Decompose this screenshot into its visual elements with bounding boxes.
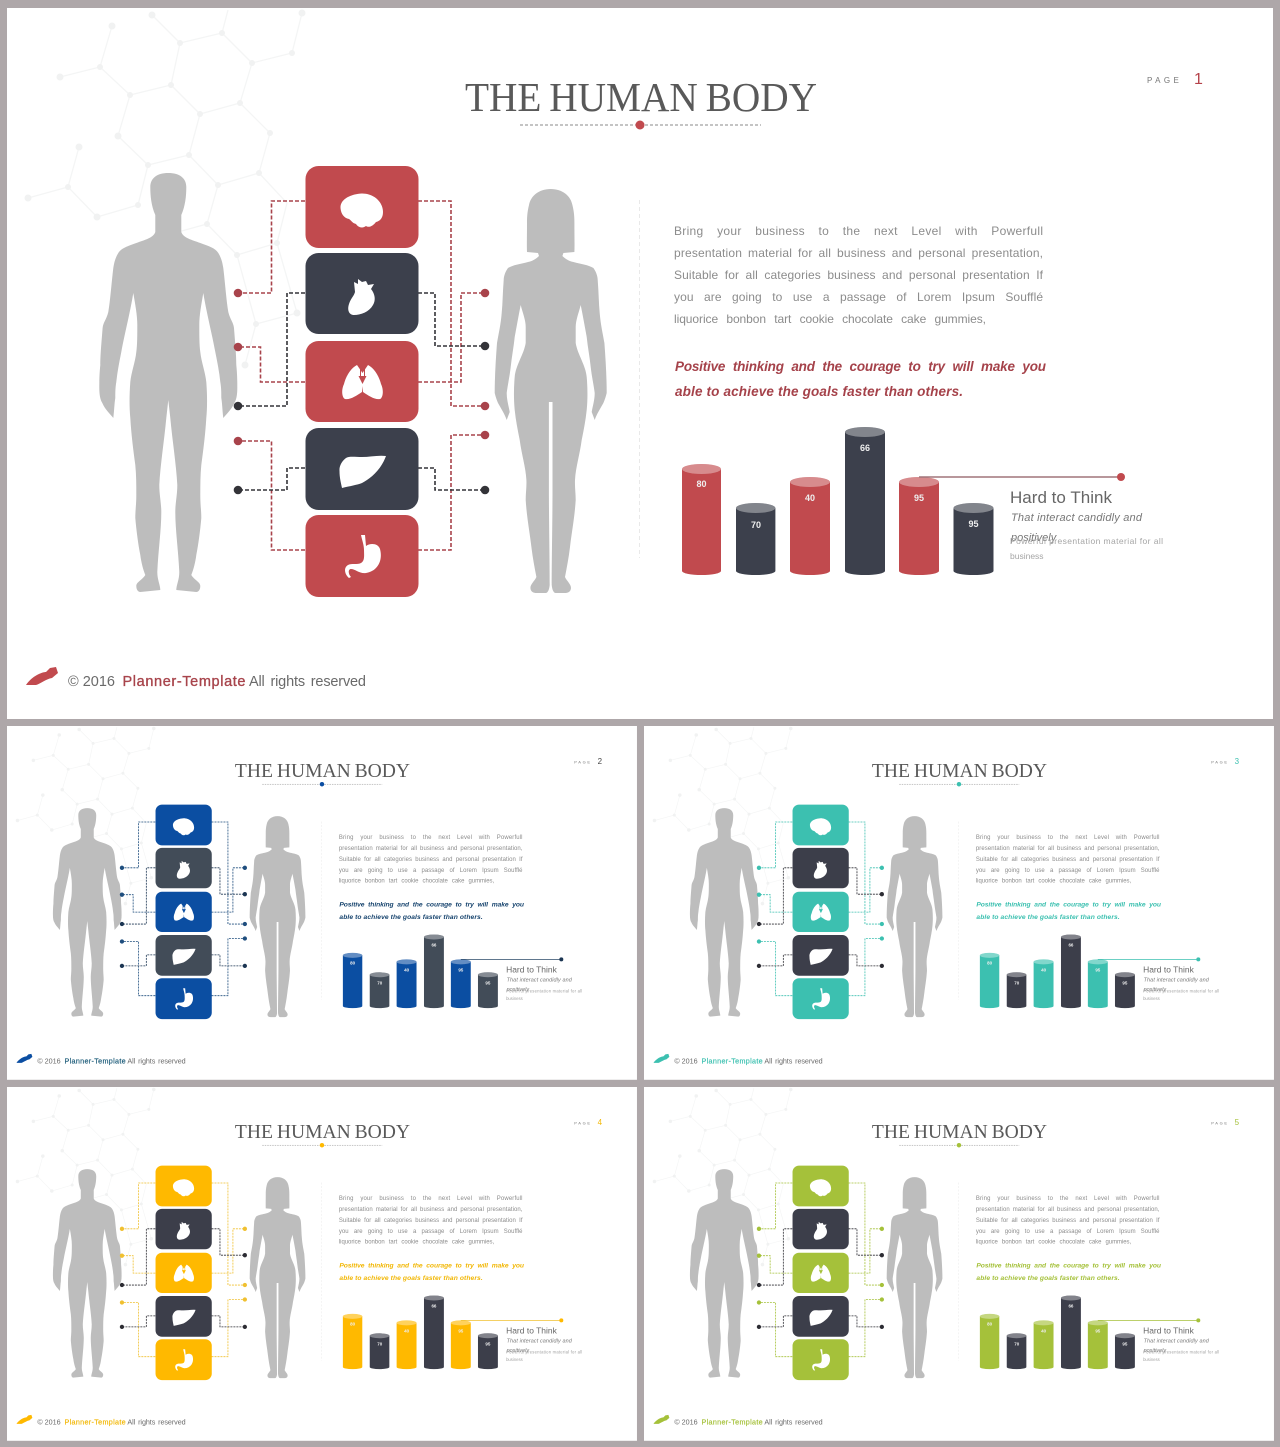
tile: stomach	[306, 515, 418, 597]
title: THE HUMAN BODY	[872, 760, 1047, 782]
tile: stomach	[793, 978, 849, 1019]
bar chart: 95	[485, 1341, 491, 1346]
body text: you are going to use a passage of Lorem Ipsum Soufflé	[674, 290, 1043, 304]
tile: lungs	[793, 892, 849, 932]
tile: liver	[306, 428, 418, 510]
highlighted quote: Positive thinking and the courage to try will make you	[976, 1263, 1161, 1270]
tile: lungs	[306, 341, 418, 422]
body text: you are going to use a passage of Lorem Ipsum Soufflé	[976, 868, 1160, 874]
bar chart: 80	[987, 1321, 993, 1326]
bar chart: 66	[431, 942, 437, 947]
bar chart: 95	[458, 967, 464, 972]
slide background	[7, 726, 637, 1080]
highlighted quote	[339, 1263, 524, 1282]
body text: presentation material for all business and personal presentation,	[339, 1207, 523, 1213]
callout: positively	[1143, 1348, 1167, 1354]
callout: That interact candidly and	[1144, 977, 1210, 983]
page number: PAGE	[574, 1120, 592, 1125]
tile: heart	[156, 848, 212, 888]
bar chart: 80	[350, 960, 356, 965]
callout: Powerful presentation material for all	[1143, 1350, 1219, 1355]
tile: heart	[793, 1209, 849, 1249]
body text: Bring your business to the next Level with Powerfull	[339, 835, 523, 841]
bar chart	[980, 1295, 1135, 1369]
male silhouette	[690, 1169, 759, 1378]
footer	[16, 1054, 186, 1065]
tile: brain	[793, 1166, 849, 1206]
bar chart: 95	[914, 493, 924, 503]
footer: © 2016	[674, 1417, 698, 1426]
highlighted quote: able to achieve the goals faster than others.	[976, 914, 1120, 921]
highlighted quote: able to achieve the goals faster than others.	[339, 1275, 483, 1282]
bar chart: 66	[1068, 1303, 1074, 1308]
dashed connectors	[234, 201, 489, 550]
footer: Planner-Template	[64, 1056, 126, 1065]
bar chart: 95	[458, 1328, 464, 1333]
body text: Bring your business to the next Level with Powerfull	[976, 835, 1160, 841]
bar chart: 95	[1122, 1341, 1128, 1346]
callout	[919, 473, 1163, 561]
tile: stomach	[156, 978, 212, 1019]
callout: That interact candidly and	[1011, 512, 1143, 524]
footer	[653, 1415, 823, 1426]
body text: presentation material for all business and personal presentation,	[674, 246, 1043, 260]
callout: Hard to Think	[506, 964, 558, 974]
tile: stomach	[156, 1339, 212, 1380]
footer	[16, 1415, 186, 1426]
callout: positively	[1143, 987, 1167, 993]
page number: 4	[598, 1118, 603, 1127]
callout: Hard to Think	[1143, 964, 1195, 974]
body text: liquorice bonbon tart cookie chocolate cake gummies,	[339, 1240, 494, 1246]
tile: liver	[793, 935, 849, 976]
callout: That interact candidly and	[507, 1338, 573, 1344]
body text: you are going to use a passage of Lorem Ipsum Soufflé	[976, 1229, 1160, 1235]
highlighted quote: able to achieve the goals faster than others.	[976, 1275, 1120, 1282]
callout: Hard to Think	[506, 1325, 558, 1335]
bar chart: 40	[1041, 967, 1047, 972]
highlighted quote: Positive thinking and the courage to try will make you	[339, 902, 524, 909]
bar chart: 80	[987, 960, 993, 965]
callout: business	[506, 1357, 523, 1362]
callout: Powerful presentation material for all	[1143, 989, 1219, 994]
title underline	[899, 1143, 1019, 1147]
organ tile column	[156, 805, 212, 1019]
slide: page 1 red	[7, 8, 1273, 719]
highlighted quote	[976, 1263, 1161, 1282]
highlighted quote: able to achieve the goals faster than others.	[675, 384, 963, 399]
title underline	[520, 120, 761, 130]
male silhouette	[99, 173, 237, 592]
callout: Powerful presentation material for all	[506, 1350, 582, 1355]
footer: © 2016	[37, 1056, 61, 1065]
body text: you are going to use a passage of Lorem Ipsum Soufflé	[339, 1229, 523, 1235]
bar chart: 70	[377, 1342, 383, 1347]
body text: Suitable for all categories business and personal presentation If	[674, 268, 1044, 282]
bar chart: 80	[696, 479, 707, 489]
body text: liquorice bonbon tart cookie chocolate cake gummies,	[976, 1240, 1131, 1246]
body text: Suitable for all categories business and personal presentation If	[339, 1218, 523, 1224]
bar chart: 70	[751, 520, 761, 530]
slide background	[7, 1087, 637, 1441]
body text: presentation material for all business and personal presentation,	[976, 1207, 1160, 1213]
body text: liquorice bonbon tart cookie chocolate cake gummies,	[339, 879, 494, 885]
tile: liver	[156, 1296, 212, 1337]
bar chart	[343, 934, 498, 1008]
page number: PAGE	[1211, 759, 1229, 764]
body text: presentation material for all business and personal presentation,	[339, 846, 523, 852]
footer: © 2016	[674, 1056, 698, 1065]
callout: business	[1143, 1357, 1160, 1362]
highlighted quote	[339, 902, 524, 921]
bar chart: 40	[805, 493, 815, 503]
dashed connectors	[120, 822, 247, 996]
tile: lungs	[156, 1253, 212, 1293]
slide background	[644, 1087, 1274, 1441]
page number: 2	[598, 757, 603, 766]
tile: stomach	[793, 1339, 849, 1380]
dashed connectors	[757, 1183, 884, 1357]
highlighted quote	[675, 359, 1047, 399]
callout	[461, 957, 582, 1001]
bar chart: 70	[377, 981, 383, 986]
body text: presentation material for all business and personal presentation,	[976, 846, 1160, 852]
callout	[461, 1318, 582, 1362]
female silhouette	[887, 1177, 942, 1378]
bar chart: 40	[404, 967, 410, 972]
organ tile column	[793, 1166, 849, 1380]
organ tile column	[306, 166, 418, 597]
title: THE HUMAN BODY	[235, 1121, 410, 1143]
callout: That interact candidly and	[1144, 1338, 1210, 1344]
bar chart	[980, 934, 1135, 1008]
footer: Planner-Template	[701, 1417, 763, 1426]
bar chart: 66	[1068, 942, 1074, 947]
slide background	[644, 726, 1274, 1080]
bar chart: 95	[485, 980, 491, 985]
bar chart: 40	[404, 1328, 410, 1333]
female silhouette	[250, 1177, 305, 1378]
body text	[674, 224, 1044, 326]
bar chart: 95	[1122, 980, 1128, 985]
callout: That interact candidly and	[507, 977, 573, 983]
highlighted quote: able to achieve the goals faster than others.	[339, 914, 483, 921]
footer: Planner-Template	[122, 674, 246, 690]
bar chart	[343, 1295, 498, 1369]
male silhouette	[53, 1169, 122, 1378]
slide: page 5 green	[644, 1087, 1274, 1441]
bar chart: 95	[968, 519, 979, 529]
page number: PAGE	[1211, 1120, 1229, 1125]
highlighted quote: Positive thinking and the courage to try will make you	[675, 359, 1047, 374]
slide: page 2 blue	[7, 726, 637, 1080]
body text	[339, 1196, 523, 1246]
page number: PAGE	[574, 759, 592, 764]
callout: positively	[1010, 532, 1058, 544]
tile: brain	[793, 805, 849, 845]
tile: lungs	[156, 892, 212, 932]
bar chart	[682, 427, 994, 575]
slide: page 3 teal	[644, 726, 1274, 1080]
bar chart: 40	[1041, 1328, 1047, 1333]
tile: liver	[156, 935, 212, 976]
page number: 3	[1235, 757, 1240, 766]
bar chart: 70	[1014, 981, 1020, 986]
footer: All rights reserved	[249, 674, 366, 690]
tile: brain	[306, 166, 418, 248]
tile: liver	[793, 1296, 849, 1337]
slide: page 4 yellow	[7, 1087, 637, 1441]
tile: lungs	[793, 1253, 849, 1293]
female silhouette	[495, 189, 607, 593]
footer: All rights reserved	[127, 1417, 186, 1426]
tile: heart	[306, 253, 418, 334]
title underline	[899, 782, 1019, 786]
body text	[976, 835, 1160, 885]
title underline	[262, 1143, 382, 1147]
title underline	[262, 782, 382, 786]
callout: Hard to Think	[1143, 1325, 1195, 1335]
footer: Planner-Template	[701, 1056, 763, 1065]
highlighted quote: Positive thinking and the courage to try will make you	[339, 1263, 524, 1270]
footer: All rights reserved	[764, 1056, 823, 1065]
tile: heart	[793, 848, 849, 888]
page number: 1	[1194, 71, 1203, 88]
callout: positively	[506, 1348, 530, 1354]
body text: liquorice bonbon tart cookie chocolate cake gummies,	[976, 879, 1131, 885]
bar chart: 70	[1014, 1342, 1020, 1347]
title: THE HUMAN BODY	[465, 74, 817, 120]
body text: Bring your business to the next Level with Powerfull	[339, 1196, 523, 1202]
body text: liquorice bonbon tart cookie chocolate cake gummies,	[674, 312, 986, 326]
callout: business	[1143, 996, 1160, 1001]
footer: © 2016	[37, 1417, 61, 1426]
bar chart: 95	[1095, 1328, 1101, 1333]
body text: you are going to use a passage of Lorem Ipsum Soufflé	[339, 868, 523, 874]
bar chart: 66	[431, 1303, 437, 1308]
title: THE HUMAN BODY	[235, 760, 410, 782]
tile: brain	[156, 1166, 212, 1206]
bar chart: 95	[1095, 967, 1101, 972]
callout	[1098, 1318, 1219, 1362]
body text: Suitable for all categories business and personal presentation If	[339, 857, 523, 863]
body text: Bring your business to the next Level with Powerfull	[976, 1196, 1160, 1202]
callout: Powerful presentation material for all	[506, 989, 582, 994]
body text: Suitable for all categories business and personal presentation If	[976, 857, 1160, 863]
title: THE HUMAN BODY	[872, 1121, 1047, 1143]
body text	[339, 835, 523, 885]
footer	[653, 1054, 823, 1065]
highlighted quote: Positive thinking and the courage to try will make you	[976, 902, 1161, 909]
bar chart: 80	[350, 1321, 356, 1326]
dashed connectors	[120, 1183, 247, 1357]
callout: Hard to Think	[1010, 488, 1112, 507]
callout: business	[506, 996, 523, 1001]
slide background	[7, 8, 1273, 719]
page number: PAGE	[1147, 76, 1182, 85]
highlighted quote	[976, 902, 1161, 921]
footer: Planner-Template	[64, 1417, 126, 1426]
page number: 5	[1235, 1118, 1240, 1127]
tile: brain	[156, 805, 212, 845]
callout: Powerful presentation material for all	[1010, 536, 1163, 546]
footer: All rights reserved	[764, 1417, 823, 1426]
body text: Suitable for all categories business and personal presentation If	[976, 1218, 1160, 1224]
male silhouette	[690, 808, 759, 1017]
callout: positively	[506, 987, 530, 993]
female silhouette	[250, 816, 305, 1017]
dashed connectors	[757, 822, 884, 996]
footer: © 2016	[68, 674, 115, 690]
body text	[976, 1196, 1160, 1246]
organ tile column	[156, 1166, 212, 1380]
callout	[1098, 957, 1219, 1001]
footer: All rights reserved	[127, 1056, 186, 1065]
organ tile column	[793, 805, 849, 1019]
footer	[26, 667, 366, 690]
tile: heart	[156, 1209, 212, 1249]
female silhouette	[887, 816, 942, 1017]
male silhouette	[53, 808, 122, 1017]
bar chart: 66	[860, 443, 870, 453]
body text: Bring your business to the next Level with Powerfull	[674, 224, 1043, 238]
callout: business	[1010, 551, 1044, 561]
